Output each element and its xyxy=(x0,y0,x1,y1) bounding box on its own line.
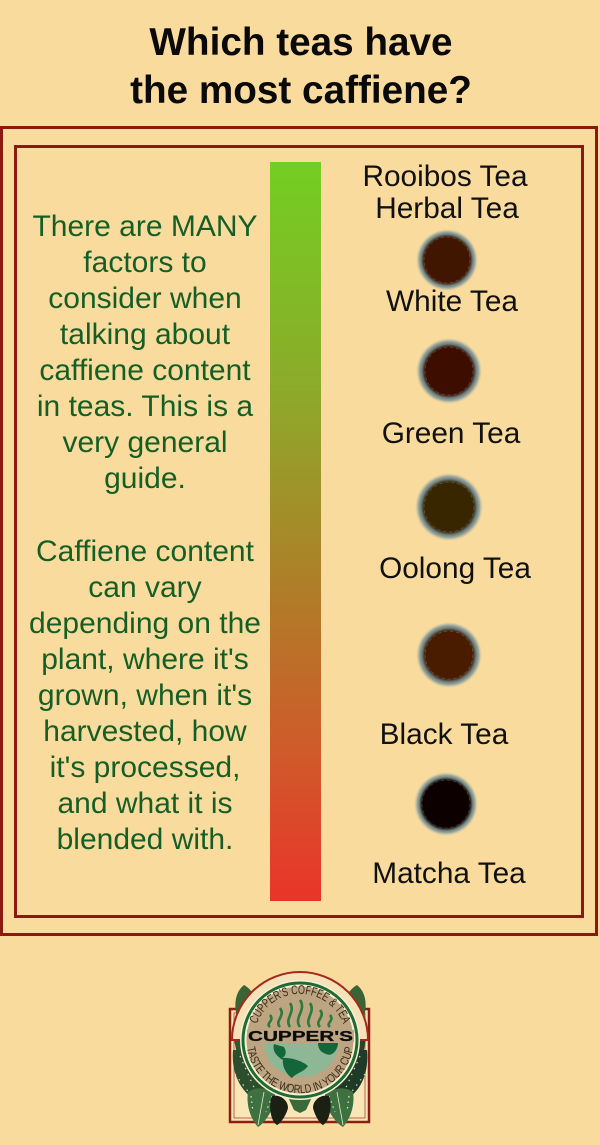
title: Which teas have xyxy=(149,21,453,64)
text block: caffeine content varies: and what it is xyxy=(57,787,233,820)
label: rooibos tea: Rooibos Tea xyxy=(362,160,528,193)
text block: caffeine content varies: Caffiene content xyxy=(36,535,254,568)
text block: caffeine content varies: plant, where it's xyxy=(41,643,249,676)
text block: many factors: guide. xyxy=(104,462,186,495)
logo curved text top: CUPPER'S COFFEE & TEA xyxy=(250,985,350,1024)
logo continents xyxy=(273,1043,338,1078)
logo frame xyxy=(230,1009,369,1122)
icon: cup oolong tea xyxy=(415,473,483,541)
icon: cup matcha tea xyxy=(414,772,478,836)
logo: Cupper's xyxy=(228,971,370,1127)
text block: many factors: caffiene content xyxy=(39,354,251,387)
title: the most caffiene? xyxy=(130,69,472,112)
text block: many factors: in teas. This is a xyxy=(37,390,253,423)
icon: cup black tea xyxy=(416,622,482,688)
logo: Cupper's: CUPPER'S xyxy=(248,1028,353,1045)
text block: caffeine content varies: it's processed, xyxy=(50,751,240,784)
logo globe xyxy=(264,1043,338,1077)
text block: caffeine content varies: grown, when it's xyxy=(38,679,252,712)
text block: caffeine content varies xyxy=(29,535,261,856)
outer frame xyxy=(0,126,598,936)
text block: many factors xyxy=(32,210,258,495)
label: white tea: White Tea xyxy=(386,285,518,318)
label: matcha tea: Matcha Tea xyxy=(372,857,526,890)
icon: cup green tea xyxy=(416,338,482,404)
label: oolong tea: Oolong Tea xyxy=(379,552,531,585)
text block: caffeine content varies: harvested, how xyxy=(43,715,247,748)
text block: many factors: consider when xyxy=(48,282,242,315)
logo badge rings xyxy=(232,972,368,1040)
label: black tea: Black Tea xyxy=(380,718,508,751)
text block: caffeine content varies: depending on the xyxy=(29,607,261,640)
title xyxy=(130,21,472,112)
label: herbal tea: Herbal Tea xyxy=(375,192,519,225)
text block: many factors: There are MANY xyxy=(32,210,258,243)
text block: many factors: talking about xyxy=(60,318,230,351)
icon: cup white tea xyxy=(416,229,478,291)
logo leaves xyxy=(233,985,367,1127)
caffeine gradient bar xyxy=(270,162,321,901)
logo wordmark xyxy=(247,1030,354,1042)
text block: caffeine content varies: can vary xyxy=(88,571,202,604)
logo steam xyxy=(269,1000,331,1027)
text block: many factors: factors to xyxy=(83,246,207,279)
text block: many factors: very general xyxy=(62,426,228,459)
logo curved text bottom: TASTE THE WORLD IN YOUR CUP xyxy=(247,1046,352,1094)
label: green tea: Green Tea xyxy=(382,417,520,450)
text block: caffeine content varies: blended with. xyxy=(57,823,233,856)
inner frame xyxy=(14,145,584,918)
